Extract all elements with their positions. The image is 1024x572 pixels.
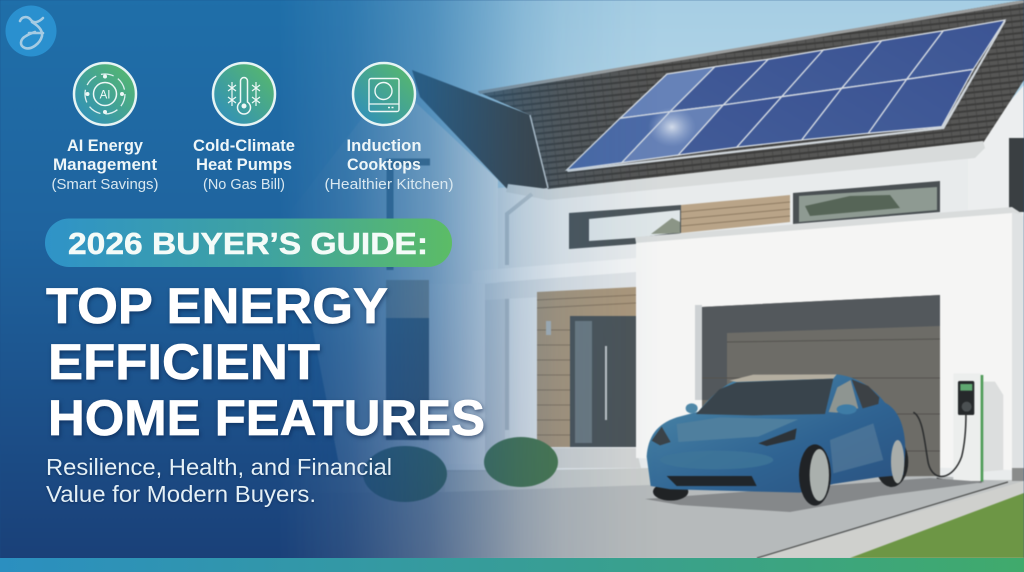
charging cable [913,412,982,482]
garage base [1012,468,1024,481]
side wing window [1009,138,1024,212]
valley flashing [530,115,548,188]
gravel strip [758,481,1024,558]
icon: cooktop [353,63,415,125]
gravel bed [445,468,650,492]
wood cladding upper [681,195,790,233]
shrub right [484,437,558,487]
rear rim [891,440,904,483]
garage block [636,209,1012,470]
side mirror right [837,404,857,414]
upper window right [793,181,940,224]
electric car [647,374,908,506]
wall lamp [546,321,551,335]
roof strip [729,374,837,382]
car body [647,374,905,493]
left-side blue gradient overlay [0,0,660,572]
roof ridge [478,0,1024,94]
front rim [810,449,829,501]
label title [346,137,422,174]
subtitle [46,454,392,507]
label note: (Smart Savings) [52,176,159,193]
entrance steps [553,448,641,468]
garage door [695,295,940,477]
driveway [0,476,1008,558]
mirror [686,403,698,413]
side wing wall [968,85,1024,240]
feature: induction cooktops [324,63,454,193]
solar array [567,20,1005,170]
icon: thermometer and snowflakes [213,63,275,125]
label note: (No Gas Bill) [203,176,285,193]
eave gutter [506,141,985,200]
main title: HOME FEATURES [48,390,485,446]
logo badge [6,6,56,56]
EV charger [953,373,1003,482]
front tyre [799,444,831,506]
door reflection [830,423,883,473]
guide badge pill [45,218,452,267]
solar frame lower edge [566,21,1006,172]
porch wall sections [429,284,537,464]
feature: cold-climate heat pumps [193,63,295,193]
label title [53,137,158,174]
front bumper highlight [660,451,773,469]
car shadow [645,478,985,512]
front grille [667,476,757,486]
label title: Management [53,156,158,174]
label title: Heat Pumps [196,156,292,174]
label title [193,137,295,174]
guide badge pill: 2026 BUYER’S GUIDE: [68,226,428,261]
side window rear [852,379,879,408]
garage cap [635,207,1024,243]
porch soffit [485,270,636,300]
front door [570,316,636,447]
label title: Cold-Climate [193,137,295,155]
downpipe [507,194,532,430]
gable roof [412,70,548,192]
side window front [829,380,858,413]
headlight right [758,428,797,446]
upper window left [569,205,681,249]
main title: TOP ENERGY [46,278,388,334]
faded left house wing [290,100,498,470]
shrub left [363,446,447,502]
porch canopy [472,258,636,284]
feature: AI energy management [52,63,159,193]
main title: EFFICIENT [48,334,320,390]
rear wheel [875,436,908,487]
hood highlight [677,417,798,442]
label note: (Healthier Kitchen) [324,176,454,193]
main title [46,278,485,446]
label title: Induction [346,137,422,155]
lawn [850,493,1024,558]
wood cladding entrance [537,287,636,447]
garage side [1012,212,1024,470]
label title: Cooktops [347,156,421,174]
windshield [696,379,833,415]
label title: AI Energy [67,137,144,155]
icon: AI: AI [100,90,110,102]
far front tyre [653,483,688,501]
recessed upper wall [498,90,1024,480]
headlight left [652,427,671,445]
driveway edge [757,482,1008,558]
subtitle: Value for Modern Buyers. [46,481,316,507]
bottom gradient bar [0,558,1024,572]
main tiled roof [478,0,1024,190]
sky [0,0,1024,300]
solar glare [648,107,696,147]
subtitle: Resilience, Health, and Financial [46,454,392,480]
ground base [0,465,1024,560]
